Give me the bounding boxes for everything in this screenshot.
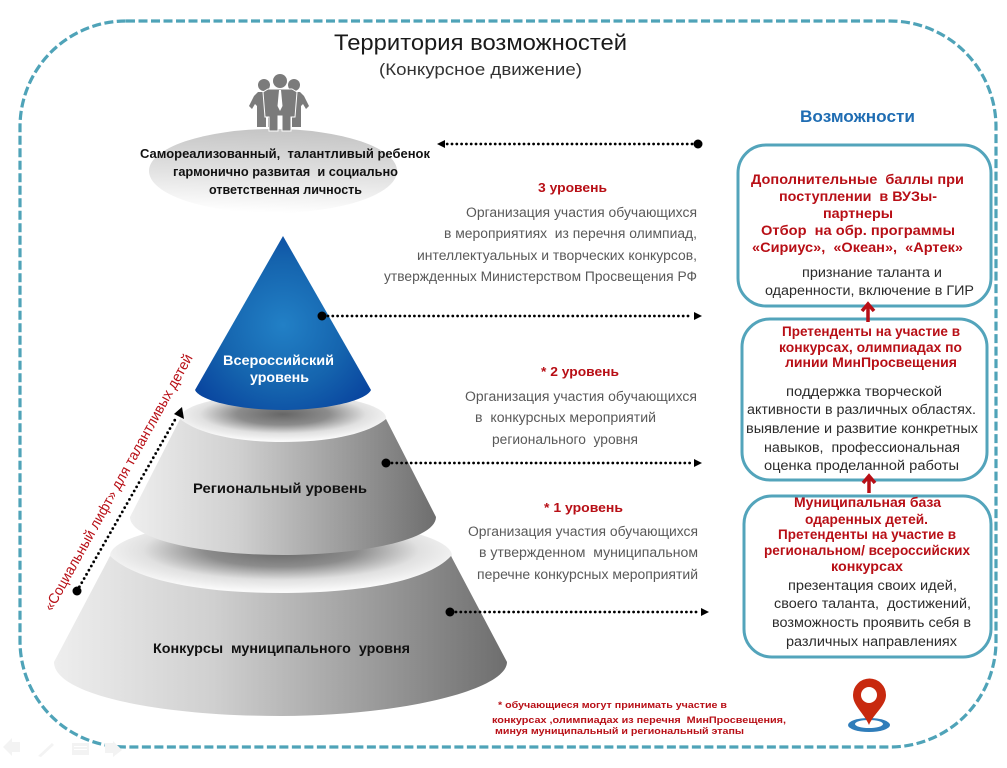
panel: bottom opportunities: региональном/ всероссийских [764,543,970,558]
panel: bottom opportunities: конкурсах [831,559,904,574]
panel: top opportunities: поступлении в ВУЗы- [779,189,937,204]
level 3 text [384,180,697,284]
panel: middle opportunities: выявление и развитие конкретных [746,421,978,436]
panel: middle opportunities [742,319,987,480]
ellipse: personal result: Самореализованный, талантливый ребенок [140,147,431,161]
slide navigation icons [3,738,122,757]
tier: municipal [54,519,507,716]
panel: bottom opportunities: Претенденты на участие в [778,527,956,542]
title: (Конкурсное движение) [379,60,582,79]
panel: bottom opportunities [744,495,991,657]
panel: bottom opportunities: Муниципальная база [794,495,942,510]
panel: bottom opportunities: одаренных детей. [805,512,928,527]
panel: middle opportunities: поддержка творческой [786,384,942,399]
panel: middle opportunities: навыков, профессиональная [764,440,960,455]
panel: top opportunities: признание таланта и [802,265,942,280]
panel: bottom opportunities: своего таланта, достижений, [774,596,971,611]
arrow: level 2 [382,458,702,468]
level 3 text: в мероприятиях из перечня олимпиад, [444,226,697,241]
level 2 text: регионального уровня [492,432,638,447]
tier: all-Russian [195,236,371,410]
heading: opportunities: Возможности [800,107,915,126]
icon: map pin [848,678,890,732]
icon: group of people [249,74,309,131]
arrow: up to middle panel [863,476,875,493]
footnote: минуя муниципальный и региональный этапы [495,726,744,737]
title: Территория возможностей [334,30,627,55]
arrow: up to top panel [862,304,874,322]
ellipse: personal result [140,129,431,213]
level 1 text: * 1 уровень [544,500,623,515]
panel: top opportunities [738,145,991,306]
level 1 text [468,500,698,582]
tier: regional: Региональный уровень [193,480,367,496]
social lift label: «Социальный лифт» для талантливых детей [42,352,197,614]
level 2 text: * 2 уровень [541,364,619,379]
tier: all-Russian: уровень [250,369,309,385]
tier: all-Russian: Всероссийский [223,352,334,368]
level 1 text: перечне конкурсных мероприятий [477,567,698,582]
arrow: social lift [72,407,184,596]
panel: middle opportunities: линии МинПросвещения [785,355,957,370]
panel: top opportunities: Отбор на обр. программы [761,223,955,238]
ellipse: personal result: гармонично развитая и социально [173,165,398,179]
level 3 text: утвержденных Министерством Просвещения РФ [384,269,697,284]
panel: middle opportunities: оценка проделанной работы [764,458,959,473]
arrow: level 1 [446,608,709,616]
panel: top opportunities: «Сириус», «Океан», «Артек» [752,240,963,255]
level 3 text: Организация участия обучающихся [466,205,697,220]
level 2 text: Организация участия обучающихся [465,389,697,404]
arrow: goal pointer [437,140,702,148]
level 1 text: Организация участия обучающихся [468,524,698,539]
panel: bottom opportunities: возможность проявить себя в [772,615,971,630]
level 3 text: 3 уровень [538,180,607,195]
level 1 text: в утвержденном муниципальном [479,545,698,560]
panel: top opportunities: Дополнительные баллы при [751,172,964,187]
arrow: level 3 [318,312,702,320]
ellipse: personal result: ответственная личность [209,183,362,197]
panel: bottom opportunities: презентация своих идей, [788,578,957,593]
title [334,30,627,79]
panel: top opportunities: одаренности, включение в ГИР [765,283,974,298]
footnote: * обучающиеся могут принимать участие в [498,700,727,711]
tier: municipal: Конкурсы муниципального уровня [153,640,410,656]
level 3 text: интеллектуальных и творческих конкурсов, [417,248,697,263]
footnote: конкурсах ,олимпиадах из перечня МинПросвещения, [492,715,786,726]
footnote [492,700,786,737]
level 2 text [465,364,697,447]
panel: middle opportunities: конкурсах, олимпиадах по [779,340,962,355]
panel: middle opportunities: Претенденты на участие в [782,324,960,339]
panel: top opportunities: партнеры [823,206,893,221]
level 2 text: в конкурсных мероприятий [475,410,656,425]
panel: middle opportunities: активности в различных областях. [747,402,976,417]
pyramid [54,236,507,716]
tier: regional [130,394,436,555]
panel: bottom opportunities: различных направлениях [786,634,957,649]
